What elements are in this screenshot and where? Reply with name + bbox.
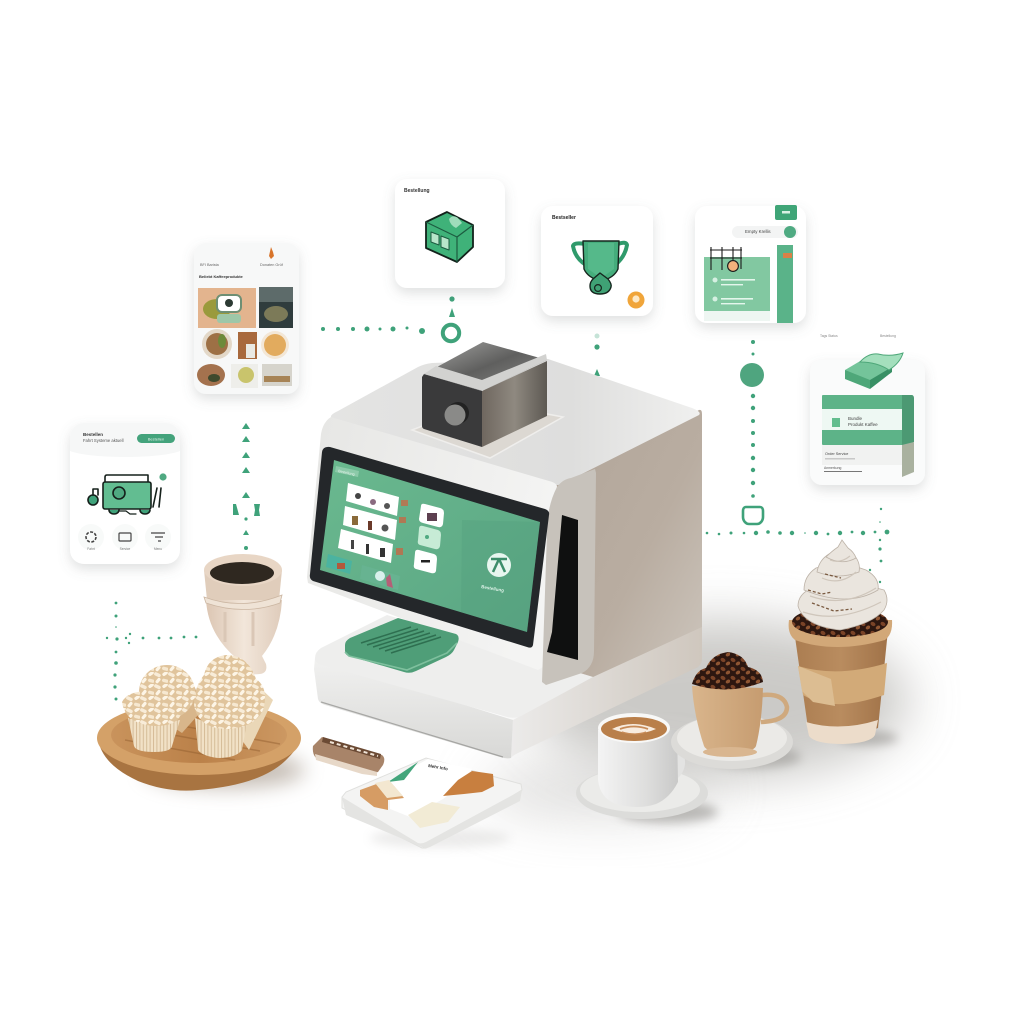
photo 6 <box>197 364 225 386</box>
table rows: Anmerkung <box>824 466 841 470</box>
gallery header text: Donaten Grüf <box>260 263 284 267</box>
card: food gallery <box>194 243 299 394</box>
cup rim <box>789 620 892 647</box>
photo 2 <box>259 287 293 328</box>
green drip tray <box>345 618 459 673</box>
chocolate bar <box>313 737 384 776</box>
feature icon 3: Menu <box>154 547 162 551</box>
feature icon 1: Fahrt <box>87 547 95 551</box>
card: delivery cart <box>70 423 180 564</box>
connector dots <box>106 296 889 700</box>
card header <box>70 423 180 457</box>
gallery header text: BFI Barista <box>200 263 220 267</box>
sleeve label: Mehr Info <box>428 763 448 771</box>
badge: orange <box>628 292 644 308</box>
card title: Bestseller <box>552 215 576 221</box>
base right face <box>511 627 702 758</box>
logo caption: Bestellung <box>481 584 505 593</box>
menu row 3 <box>338 529 393 563</box>
gallery header text <box>199 263 284 279</box>
cup sleeve <box>798 663 887 704</box>
machine base <box>314 615 702 758</box>
icon: green box <box>426 212 473 262</box>
green panel <box>822 395 914 445</box>
screen title tag <box>335 466 359 477</box>
green tab <box>775 205 797 220</box>
screen bezel <box>310 447 549 648</box>
icon: cart <box>88 475 161 514</box>
cream swirl <box>798 540 887 630</box>
pastry tray <box>342 758 522 848</box>
photo 4 <box>238 332 257 359</box>
photo 3 <box>202 329 232 359</box>
pastry right <box>443 771 494 796</box>
base top <box>315 615 593 718</box>
gallery header text: Beliebt Kaffeeprodukte <box>199 274 244 279</box>
green panel: Bundle <box>848 416 863 421</box>
connector node: solid circle <box>740 363 764 387</box>
feature icon 2 <box>112 524 138 551</box>
feature icon 2: Service <box>120 547 131 551</box>
menu row 2 <box>343 506 397 540</box>
top labels: Tags Status <box>820 334 838 338</box>
hopper right face <box>482 361 547 447</box>
card sub text: Fahrt Systeme aktuell <box>83 438 124 443</box>
screen panel shade <box>461 520 540 632</box>
pastry left <box>360 782 404 810</box>
recess frame <box>542 469 596 685</box>
photo 8 <box>262 364 292 386</box>
latte cup <box>576 713 708 819</box>
search pill: Empty Krellis <box>745 229 771 234</box>
top labels: Bestellung <box>880 334 896 338</box>
icon: rack with orange ball <box>710 247 742 271</box>
cocoa drizzle <box>808 574 852 611</box>
tray outer <box>342 758 522 848</box>
screen <box>320 460 540 632</box>
base left face <box>314 658 513 758</box>
hopper plate <box>412 402 563 458</box>
floor shadows <box>145 620 910 848</box>
feature icon 3 <box>145 524 171 551</box>
side bar <box>777 245 793 323</box>
hopper chrome lip <box>424 354 547 391</box>
table rows: Order Service <box>825 452 848 456</box>
machine top surface <box>331 359 700 485</box>
card: product box <box>810 328 925 485</box>
muffin left <box>122 665 199 752</box>
green paper tip <box>388 762 418 782</box>
green panel: Produkt Kaffee <box>848 422 878 427</box>
bean hopper <box>412 342 563 458</box>
card title: Bestellung <box>404 188 430 194</box>
option tile 2 <box>418 526 441 549</box>
whipped cream cup <box>789 540 892 744</box>
card: trophy <box>541 206 653 316</box>
card: dashboard <box>695 205 806 323</box>
connector node: ring <box>443 325 459 341</box>
paper sleeve <box>390 759 472 817</box>
dark cavity <box>547 515 578 660</box>
card: package <box>395 179 505 288</box>
photo 7 <box>231 364 258 388</box>
hopper knob <box>444 402 469 426</box>
sleeve wrap <box>798 666 835 706</box>
card heading text: Bestellen <box>83 432 103 437</box>
top labels <box>820 328 912 350</box>
photo 1 <box>198 288 256 328</box>
panel: green sheet <box>704 257 770 321</box>
screen title tag: Bestellung <box>338 469 355 476</box>
connector node: rounded square <box>743 507 763 524</box>
coffee machine <box>307 342 702 758</box>
gallery app icon <box>269 247 274 259</box>
cake slices <box>408 802 460 828</box>
card button: Bestellen <box>148 436 164 442</box>
hopper top <box>424 342 547 391</box>
feature icon 1 <box>78 524 104 551</box>
goblet cup <box>204 554 282 674</box>
photo 5 <box>261 331 289 359</box>
tray front lip <box>342 790 522 848</box>
machine front band <box>307 417 557 670</box>
option tile 3 <box>414 550 437 573</box>
bottom thumbnails <box>326 554 400 590</box>
logo <box>487 553 511 577</box>
food strip <box>396 500 408 555</box>
table rows <box>822 442 914 477</box>
cream swirl lines <box>803 556 881 616</box>
card button <box>137 434 175 443</box>
wooden plate <box>97 701 301 791</box>
icon: badge dot <box>159 473 167 481</box>
menu row 1 <box>346 483 399 516</box>
brown cup with beans <box>671 652 793 769</box>
icon: trophy <box>573 241 627 294</box>
option tile 1 <box>419 504 444 527</box>
hopper front face <box>422 374 482 447</box>
muffin right <box>194 655 273 758</box>
machine side <box>533 410 702 737</box>
icon: green package <box>845 353 903 389</box>
